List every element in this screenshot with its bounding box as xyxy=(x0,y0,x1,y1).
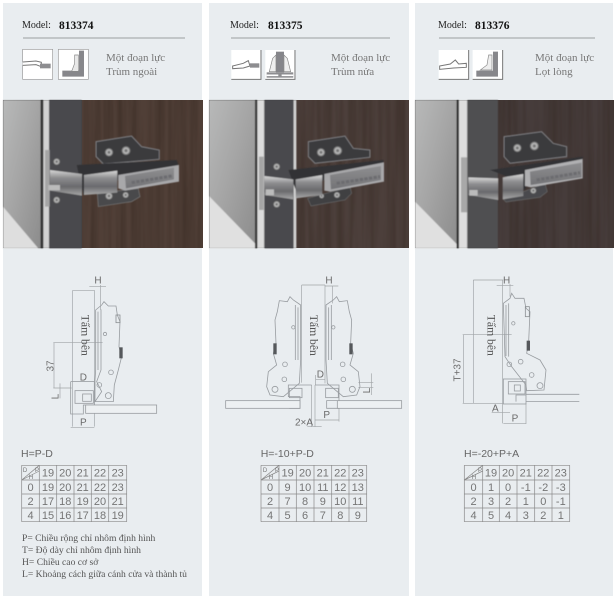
legend text: H= Chiều cao cơ sở xyxy=(22,557,99,568)
table: H values: 4 xyxy=(27,510,34,522)
table: H values: H xyxy=(269,475,273,481)
table: H values: P xyxy=(35,468,39,474)
table: H values: 15 xyxy=(42,510,54,522)
table: H values: 2 xyxy=(540,510,546,522)
table: H values: 7 xyxy=(285,496,291,508)
table: H values: 2 xyxy=(267,496,273,508)
photo: hinge 813375 xyxy=(209,100,409,248)
diagram: overlay hinge dimensions: L xyxy=(51,393,62,399)
text: hinge type xyxy=(106,52,165,78)
diagram: inset hinge dimensions: T+37 xyxy=(453,358,464,382)
legend text: L= Khoảng cách giữa cánh cửa và thành tủ xyxy=(22,569,187,580)
table: H values: 11 xyxy=(352,496,364,508)
table: H values: 17 xyxy=(77,510,89,522)
table: H values: D xyxy=(263,468,268,474)
table: H values: 2 xyxy=(27,496,34,508)
table: H values: 23 xyxy=(112,482,124,494)
icon: overlay hinge on cabinet xyxy=(58,49,88,79)
diagram: half overlay hinge dimensions xyxy=(226,276,402,429)
table: H values: 18 xyxy=(94,510,106,522)
panel: model 813376 xyxy=(415,3,614,596)
text: hinge type: Trùm ngoài xyxy=(106,66,157,78)
table: H values: H xyxy=(29,475,33,481)
table: H values: 8 xyxy=(337,510,343,522)
icon: overlay hinge side xyxy=(23,49,53,79)
model heading 813374: 813374 xyxy=(59,20,94,32)
table: H values: 2 xyxy=(470,496,477,508)
text: hinge type: Một đoạn lực xyxy=(331,52,390,64)
table: H values: 13 xyxy=(352,482,364,494)
diagram: inset hinge dimensions: A xyxy=(492,403,499,414)
table: H values: -3 xyxy=(556,482,566,494)
table: H values: 1 xyxy=(558,510,564,522)
diagram: overlay hinge dimensions: 37 xyxy=(45,360,56,372)
diagram: overlay hinge dimensions: H xyxy=(94,276,102,287)
panel: model 813374 xyxy=(3,3,203,596)
text: hinge type: Trùm nửa xyxy=(331,66,374,78)
photo: hinge 813374 xyxy=(3,100,203,248)
diagram: half overlay hinge dimensions: Tấm bên xyxy=(307,315,320,356)
diagram: half overlay hinge dimensions: 2×A xyxy=(295,418,313,429)
table: H values: 10 xyxy=(334,496,346,508)
table: H values: 1 xyxy=(488,482,494,494)
table: H values: -2 xyxy=(538,482,548,494)
table: H values: 4 xyxy=(505,510,511,522)
formula: H=P-D xyxy=(21,448,53,460)
table: H values xyxy=(464,465,570,522)
table: H values: 22 xyxy=(94,468,106,480)
table: H values: 21 xyxy=(77,482,89,494)
table: H values: 23 xyxy=(352,468,364,480)
table: H values: P xyxy=(275,468,279,474)
table: H values: 16 xyxy=(59,510,71,522)
table: H values: 7 xyxy=(320,510,326,522)
model heading 813375: 813375 xyxy=(268,20,303,32)
table: H values: 19 xyxy=(281,468,294,480)
icon: half overlay hinge on cabinet xyxy=(265,50,295,79)
diagram: half overlay hinge dimensions: D xyxy=(317,370,324,381)
table: H values: 21 xyxy=(317,468,329,480)
table: H values: 19 xyxy=(77,496,89,508)
formula: H=-10+P-D xyxy=(261,448,314,460)
table: H values: 19 xyxy=(42,468,54,480)
table: H values: 20 xyxy=(299,468,311,480)
text: hinge type: Một đoạn lực xyxy=(106,52,165,64)
text: hinge type: Lọt lòng xyxy=(535,66,573,78)
table: H values: 11 xyxy=(317,482,329,494)
table: H values: 4 xyxy=(267,510,273,522)
table: H values: 22 xyxy=(334,468,346,480)
table: H values: 23 xyxy=(555,468,567,480)
icon: inset hinge on cabinet xyxy=(473,50,503,79)
table: H values: 19 xyxy=(485,468,497,480)
diagram: overlay hinge dimensions: Tấm bên xyxy=(79,315,92,356)
model heading 813375 xyxy=(230,20,390,38)
table: H values: 3 xyxy=(488,496,494,508)
table: H values: 17 xyxy=(42,496,54,508)
table: H values: 19 xyxy=(42,482,54,494)
diagram: inset hinge dimensions: Tấm bên xyxy=(485,315,498,356)
table: H values: 19 xyxy=(112,510,124,522)
model heading 813374 xyxy=(22,20,185,38)
diagram: overlay hinge dimensions xyxy=(45,276,157,428)
table: H values: 9 xyxy=(355,510,361,522)
diagram: overlay hinge dimensions: P xyxy=(80,417,87,428)
table: H values: D xyxy=(23,468,28,474)
diagram: overlay hinge dimensions: D xyxy=(80,372,87,383)
diagram: inset hinge dimensions: P xyxy=(512,414,519,425)
table: H values: 18 xyxy=(59,496,71,508)
table: H values: -1 xyxy=(521,482,531,494)
table: H values: 22 xyxy=(537,468,549,480)
formula: H=-20+P+A xyxy=(464,448,519,460)
text: hinge type xyxy=(535,52,594,78)
table: H values: -1 xyxy=(556,496,566,508)
table: H values: 20 xyxy=(59,482,71,494)
table: H values: P xyxy=(478,468,482,474)
legend text xyxy=(22,533,187,580)
model heading 813376: Model: xyxy=(438,20,467,31)
model heading 813374: Model: xyxy=(22,20,51,31)
table: H values xyxy=(22,465,127,522)
text: hinge type xyxy=(331,52,390,78)
icon: half overlay hinge side xyxy=(231,50,261,79)
table: H values: 21 xyxy=(112,496,124,508)
table: H values: 0 xyxy=(27,482,34,494)
table: H values: 23 xyxy=(112,468,124,480)
table: H values: 9 xyxy=(320,496,326,508)
model heading 813376 xyxy=(438,20,595,38)
table: H values: 5 xyxy=(285,510,291,522)
photo: hinge 813376 xyxy=(415,100,614,248)
table: H values: 0 xyxy=(470,482,477,494)
table: H values: 2 xyxy=(505,496,511,508)
table: H values: 6 xyxy=(302,510,308,522)
diagram: inset hinge dimensions xyxy=(453,275,579,425)
legend text: P= Chiều rộng chỉ nhôm định hình xyxy=(22,533,156,544)
table: H values: 21 xyxy=(77,468,89,480)
table: H values: 10 xyxy=(299,482,311,494)
table: H values: 5 xyxy=(488,510,494,522)
table: H values: 0 xyxy=(540,496,546,508)
table: H values: 20 xyxy=(502,468,514,480)
text: hinge type: Một đoạn lực xyxy=(535,52,594,64)
table: H values: 0 xyxy=(505,482,511,494)
table: H values: 12 xyxy=(334,482,346,494)
table: H values: 1 xyxy=(523,496,529,508)
table: H values: 8 xyxy=(302,496,308,508)
table: H values: 21 xyxy=(520,468,532,480)
table: H values: 22 xyxy=(94,482,106,494)
panel: model 813375 xyxy=(209,3,409,596)
icon: inset hinge side xyxy=(439,50,469,79)
table: H values: 0 xyxy=(267,482,273,494)
model heading 813376: 813376 xyxy=(475,20,510,32)
table: H values: 3 xyxy=(523,510,529,522)
table: H values: 9 xyxy=(285,482,291,494)
model heading 813375: Model: xyxy=(230,20,259,31)
diagram: inset hinge dimensions: H xyxy=(503,275,510,286)
table: H values: 4 xyxy=(470,510,477,522)
table: H values: H xyxy=(472,475,476,481)
diagram: half overlay hinge dimensions: P xyxy=(323,410,330,421)
diagram: half overlay hinge dimensions: L xyxy=(362,387,373,393)
table: H values xyxy=(261,465,367,522)
table: H values: 20 xyxy=(94,496,106,508)
legend text: T= Độ dày chỉ nhôm định hình xyxy=(22,545,141,556)
table: H values: 20 xyxy=(59,468,71,480)
diagram: half overlay hinge dimensions: H xyxy=(325,276,333,287)
